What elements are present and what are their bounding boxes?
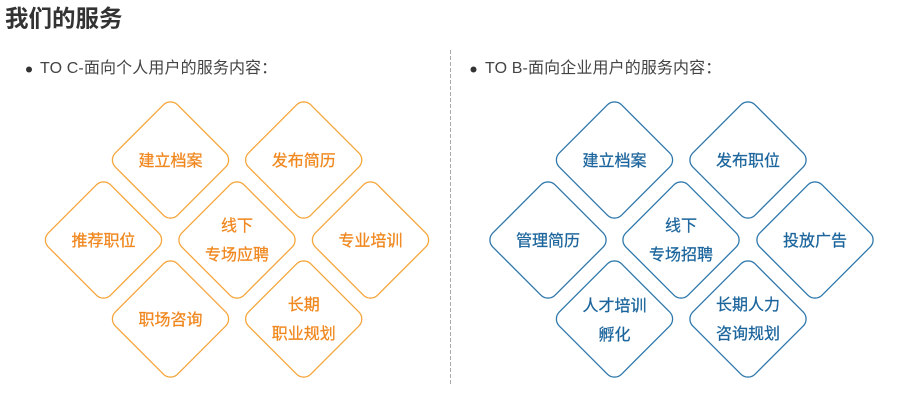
diamond: 长期人力咨询规划: 咨询规划 xyxy=(716,325,780,343)
diamond: 推荐职位: 推荐职位 xyxy=(71,232,136,250)
diamond: 发布职位 xyxy=(686,98,810,222)
title: 我们的服务 xyxy=(5,6,122,32)
diamond: 线下专场应聘: 专场应聘 xyxy=(205,245,269,264)
diamond: 管理简历: 管理简历 xyxy=(516,232,580,250)
diamond: 线下专场应聘: 线下 xyxy=(221,217,253,235)
divider xyxy=(450,50,452,384)
diamond: 专业培训 xyxy=(308,178,433,302)
diamond: 人才培训孵化 xyxy=(552,257,677,381)
bullet heading: to C: TO C-面向个人用户的服务内容： xyxy=(40,59,277,77)
diamond: 长期人力咨询规划: 长期人力 xyxy=(716,296,780,314)
diamond: 投放广告: 投放广告 xyxy=(783,232,847,250)
diamond: 长期职业规划: 职业规划 xyxy=(272,325,336,343)
panel: to B xyxy=(470,59,877,381)
diamond: 职场咨询 xyxy=(108,257,233,381)
diamond: 人才培训孵化: 孵化 xyxy=(598,326,631,344)
diamond: 线下专场招聘: 专场招聘 xyxy=(649,246,713,264)
diamond: 投放广告 xyxy=(753,178,877,302)
diamond: 线下专场招聘: 线下 xyxy=(665,217,697,235)
diamond: 发布简历: 发布简历 xyxy=(272,152,336,170)
diamond: 建立档案 xyxy=(552,98,677,222)
diamond: 长期职业规划: 长期 xyxy=(288,296,320,314)
diamond: 建立档案: 建立档案 xyxy=(138,152,203,170)
diamond: 推荐职位 xyxy=(41,178,166,302)
diamond group: to C xyxy=(41,98,433,381)
panel: to C xyxy=(26,59,433,381)
diamond: 专业培训: 专业培训 xyxy=(338,232,403,250)
diamond: 长期职业规划 xyxy=(241,257,366,381)
diamond: 发布简历 xyxy=(241,98,366,222)
diamond: 职场咨询: 职场咨询 xyxy=(138,311,203,329)
diamond group: to B xyxy=(486,98,877,381)
diamond: 线下专场应聘 xyxy=(175,178,299,302)
diamond: 发布职位: 发布职位 xyxy=(716,152,780,170)
diamond: 建立档案 xyxy=(108,98,233,222)
diamond: 线下专场招聘 xyxy=(619,178,743,302)
bullet heading: to B: TO B-面向企业用户的服务内容： xyxy=(485,59,721,77)
diamond: 建立档案: 建立档案 xyxy=(582,152,647,170)
diamond: 管理简历 xyxy=(486,178,610,302)
diamond: 人才培训孵化: 人才培训 xyxy=(582,297,647,315)
diamond: 长期人力咨询规划 xyxy=(686,257,810,381)
